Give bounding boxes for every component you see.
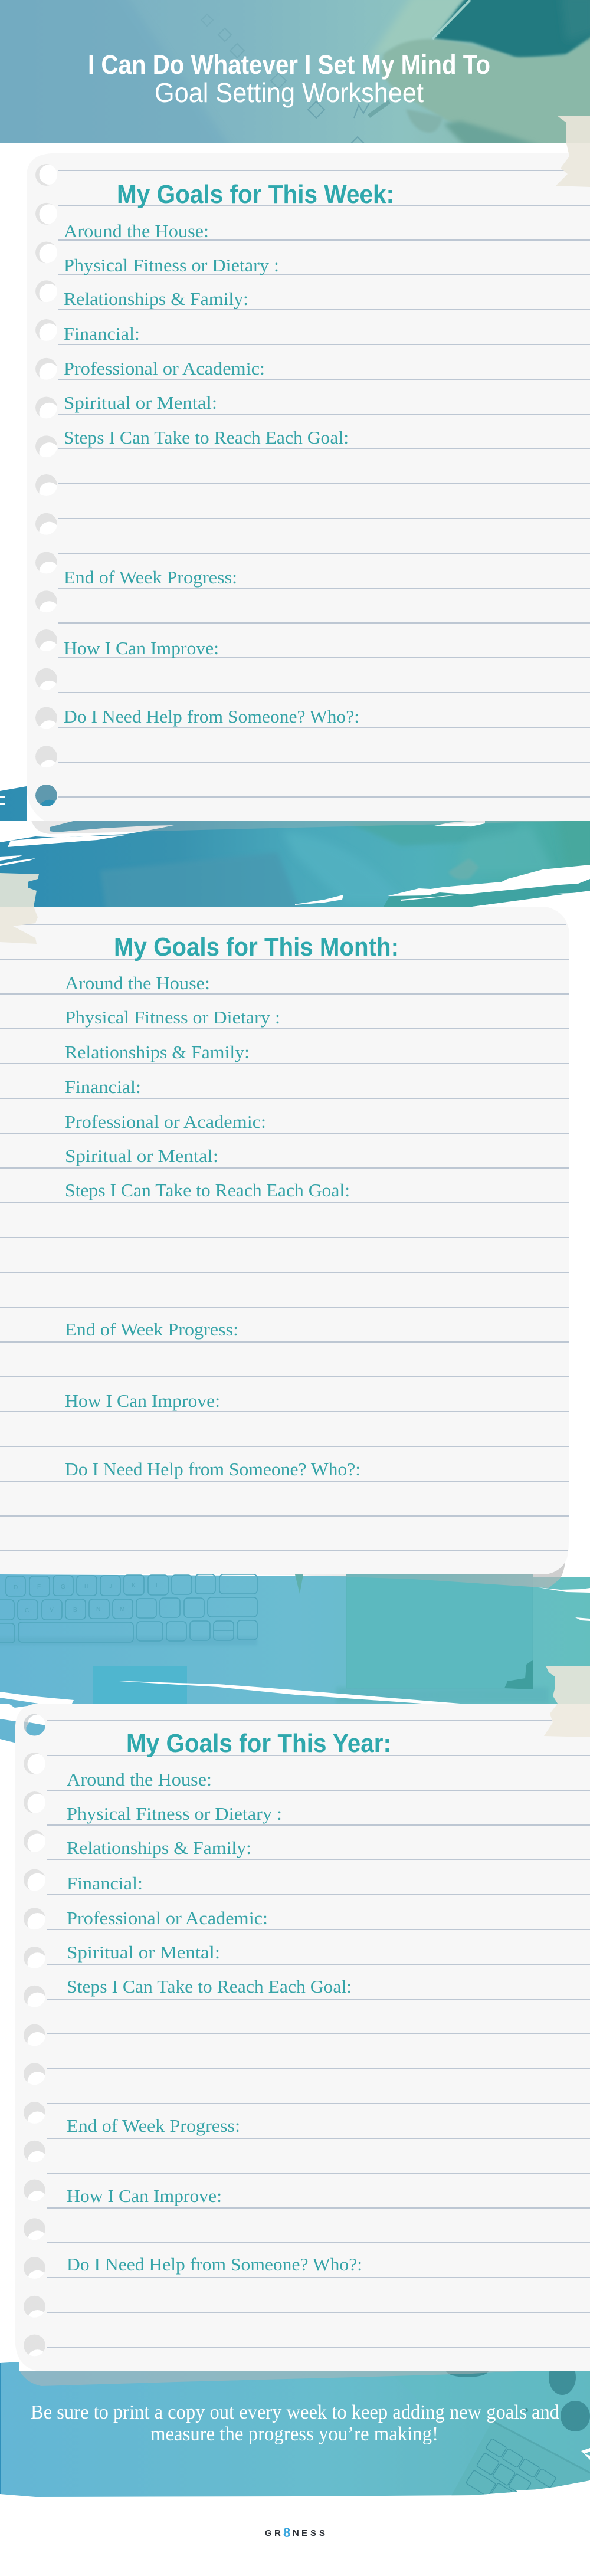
sheet shadow xyxy=(31,821,590,834)
panel: week sheet xyxy=(27,153,590,821)
ruled lines xyxy=(0,924,569,1551)
labels: week: Around the House: xyxy=(64,221,209,241)
keyboard: H xyxy=(84,1583,88,1590)
notebook xyxy=(336,1574,549,1704)
labels: year xyxy=(67,1769,362,2275)
panel: month sheet xyxy=(0,907,569,1574)
tape: year sheet xyxy=(544,1666,590,1737)
sticky note xyxy=(93,1666,187,1704)
heading: month: My Goals for This Month: xyxy=(114,933,399,962)
logo: NESS xyxy=(293,2528,325,2538)
labels: week: Do I Need Help from Someone? Who?: xyxy=(64,706,359,727)
labels: week xyxy=(64,221,359,727)
labels: week: Professional or Academic: xyxy=(64,358,265,379)
keyboard: J xyxy=(109,1583,112,1590)
labels: month: Professional or Academic: xyxy=(65,1111,266,1132)
icon: tablet keyboard xyxy=(466,2439,556,2495)
sheet shadow: month xyxy=(177,1562,565,1588)
keyboard: V xyxy=(50,1607,54,1613)
subtitle: Goal Setting Worksheet xyxy=(155,77,424,108)
labels: year: Do I Need Help from Someone? Who?: xyxy=(67,2254,362,2275)
sheet shadow: year xyxy=(19,2371,531,2386)
labels: week: Steps I Can Take to Reach Each Goal: xyxy=(64,427,349,448)
ruled lines xyxy=(47,1721,590,2347)
white brush strokes xyxy=(0,796,590,907)
tape: week sheet xyxy=(556,116,590,187)
labels: week: Spiritual or Mental: xyxy=(64,392,217,413)
labels: year: Physical Fitness or Dietary : xyxy=(67,1803,282,1824)
labels: year: How I Can Improve: xyxy=(67,2186,222,2206)
labels: month: Relationships & Family: xyxy=(65,1042,250,1062)
footer message xyxy=(31,2401,559,2445)
ruled lines xyxy=(58,170,590,797)
keyboard xyxy=(0,1574,257,1645)
tape: month sheet xyxy=(0,873,39,944)
keyboard: F xyxy=(37,1584,41,1590)
labels: year: Financial: xyxy=(67,1873,143,1894)
labels: month: Spiritual or Mental: xyxy=(65,1146,218,1166)
logo: 8 xyxy=(283,2525,290,2540)
footer callout band xyxy=(0,2360,590,2505)
photo band 2 xyxy=(0,786,590,911)
labels: month: Around the House: xyxy=(65,973,210,993)
labels: month: Physical Fitness or Dietary : xyxy=(65,1007,280,1028)
labels: year: Relationships & Family: xyxy=(67,1837,251,1858)
keyboard: D xyxy=(14,1584,18,1591)
labels: year: Steps I Can Take to Reach Each Goal: xyxy=(67,1976,352,1997)
labels: month: Do I Need Help from Someone? Who?: xyxy=(65,1459,360,1479)
heading: year: My Goals for This Year: xyxy=(126,1729,391,1758)
footer message: measure the progress you’re making! xyxy=(150,2423,438,2445)
keyboard: N xyxy=(96,1606,100,1613)
labels: month: Financial: xyxy=(65,1077,141,1097)
heading: week: My Goals for This Week: xyxy=(117,180,394,209)
labels: year: Professional or Academic: xyxy=(67,1908,268,1928)
keyboard: C xyxy=(25,1607,29,1614)
labels: month xyxy=(65,973,360,1479)
header banner photo xyxy=(0,0,590,155)
labels: week: Relationships & Family: xyxy=(64,288,248,309)
keyboard: B xyxy=(73,1607,77,1613)
binder holes xyxy=(24,1714,45,2355)
keyboard: M xyxy=(120,1606,124,1613)
keyboard: K xyxy=(132,1583,136,1589)
footer message: Be sure to print a copy out every week to keep adding new goals and xyxy=(31,2401,559,2423)
title: I Can Do Whatever I Set My Mind To xyxy=(88,50,490,80)
labels: month: How I Can Improve: xyxy=(65,1390,220,1411)
panel: year sheet xyxy=(15,1704,590,2371)
keyboard: G xyxy=(61,1584,65,1590)
icon: dark blobs xyxy=(446,2371,590,2431)
binder holes xyxy=(35,164,57,806)
labels: month: End of Week Progress: xyxy=(65,1319,238,1340)
labels: year: End of Week Progress: xyxy=(67,2115,240,2136)
labels: week: Physical Fitness or Dietary : xyxy=(64,255,279,275)
white brush strokes xyxy=(0,1587,590,1786)
labels: month: Steps I Can Take to Reach Each Goal: xyxy=(65,1180,350,1200)
labels: week: How I Can Improve: xyxy=(64,638,219,658)
logo: GR xyxy=(265,2528,281,2538)
photo band 3 xyxy=(0,1574,590,1743)
labels: week: End of Week Progress: xyxy=(64,567,237,588)
keyboard: L xyxy=(156,1583,159,1589)
pen xyxy=(295,1574,303,1594)
labels: week: Financial: xyxy=(64,323,140,344)
labels: year: Spiritual or Mental: xyxy=(67,1942,220,1963)
labels: year: Around the House: xyxy=(67,1769,212,1790)
